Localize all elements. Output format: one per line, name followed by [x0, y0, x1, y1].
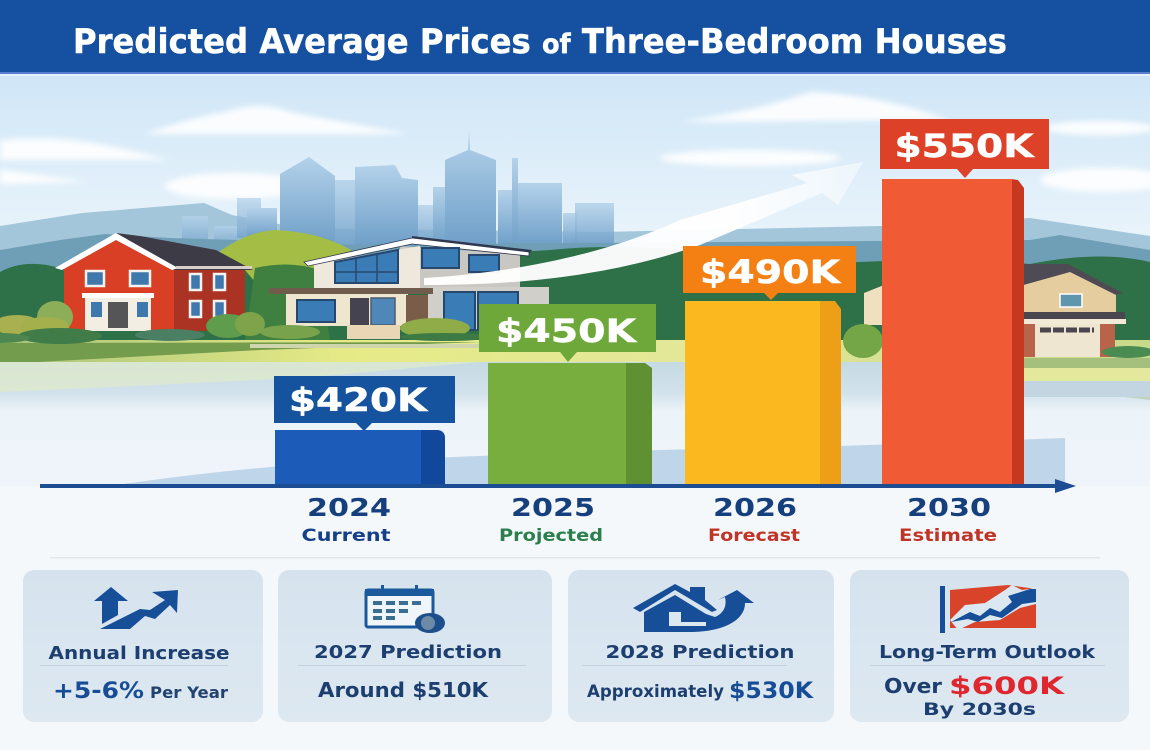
far mountains — [0, 203, 1150, 300]
near mountains — [0, 234, 1150, 300]
water — [0, 362, 1150, 486]
tree line — [0, 247, 1150, 350]
axis label: 2030 Estimate — [899, 493, 997, 546]
axis label: 2026 Forecast: 2026 — [713, 493, 797, 522]
axis label: 2025 Projected: Projected — [499, 526, 603, 546]
icon: up arrows — [94, 587, 178, 629]
card: 2028 prediction: 2028 Prediction — [606, 642, 794, 663]
house: modern two-storey — [269, 236, 549, 339]
illustrated background scene — [0, 73, 1150, 486]
card: annual increase — [23, 570, 263, 722]
trend arrow — [424, 162, 863, 285]
clouds — [0, 92, 1150, 199]
card: long-term outlook — [850, 570, 1129, 722]
axis label: 2025 Projected — [499, 493, 603, 546]
title: Predicted Average Prices of Three-Bedroom Houses — [73, 22, 1007, 62]
bar: 2025 — [479, 304, 656, 485]
shrubs — [0, 301, 1150, 358]
city skyline — [182, 130, 614, 250]
axis label: 2025 Projected: 2025 — [511, 493, 595, 522]
axis label: 2026 Forecast: Forecast — [708, 526, 800, 546]
card: long-term outlook: $600K — [949, 672, 1066, 700]
icon: chart flag — [940, 585, 1036, 633]
axis label: 2024 Current: 2024 — [307, 493, 391, 522]
axis label: 2024 Current — [302, 493, 391, 546]
icon: calendar — [365, 585, 445, 633]
porch — [85, 296, 151, 331]
card: annual increase: Per Year — [150, 683, 228, 702]
card: 2028 prediction — [568, 570, 834, 722]
label: $450K: $450K — [496, 312, 637, 350]
house: beige garage house — [864, 264, 1126, 357]
house: red two-storey — [55, 233, 253, 331]
lawn — [0, 340, 1150, 364]
header band — [0, 0, 1150, 76]
card: annual increase: +5-6% — [53, 679, 144, 704]
x axis arrow — [40, 479, 1076, 493]
axis label: 2026 Forecast — [708, 493, 800, 546]
label: $550K: $550K — [894, 127, 1035, 165]
label: $490K: $490K — [700, 253, 841, 291]
bar chart — [40, 119, 1076, 546]
card: 2027 prediction: 2027 Prediction — [314, 642, 502, 663]
card: annual increase: Annual Increase — [48, 643, 230, 664]
axis label: 2030 Estimate: Estimate — [899, 526, 997, 546]
windows — [86, 271, 225, 317]
axis label: 2024 Current: Current — [302, 526, 390, 546]
card: 2027 prediction — [278, 570, 552, 722]
card: 2028 prediction: $530K — [729, 679, 814, 704]
card: long-term outlook: Over — [884, 674, 942, 698]
label: $420K — [274, 376, 455, 431]
icon: house with arrow — [633, 584, 754, 632]
bar: 2026 — [683, 246, 856, 485]
label: $490K — [683, 246, 856, 300]
label: $450K — [479, 304, 656, 362]
card: 2027 prediction: Around $510K — [318, 678, 490, 702]
card: 2028 prediction: Approximately — [587, 682, 724, 702]
windows — [335, 250, 398, 283]
sky — [0, 73, 1150, 273]
card: long-term outlook: By 2030s — [923, 700, 1036, 720]
label: $550K — [880, 119, 1049, 178]
bar: 2030 — [880, 119, 1049, 485]
axis label: 2030 Estimate: 2030 — [907, 493, 991, 522]
bar: 2024 — [274, 376, 455, 485]
label: $420K: $420K — [289, 381, 428, 419]
divider — [50, 557, 1100, 558]
card: long-term outlook: Long-Term Outlook — [879, 642, 1096, 663]
